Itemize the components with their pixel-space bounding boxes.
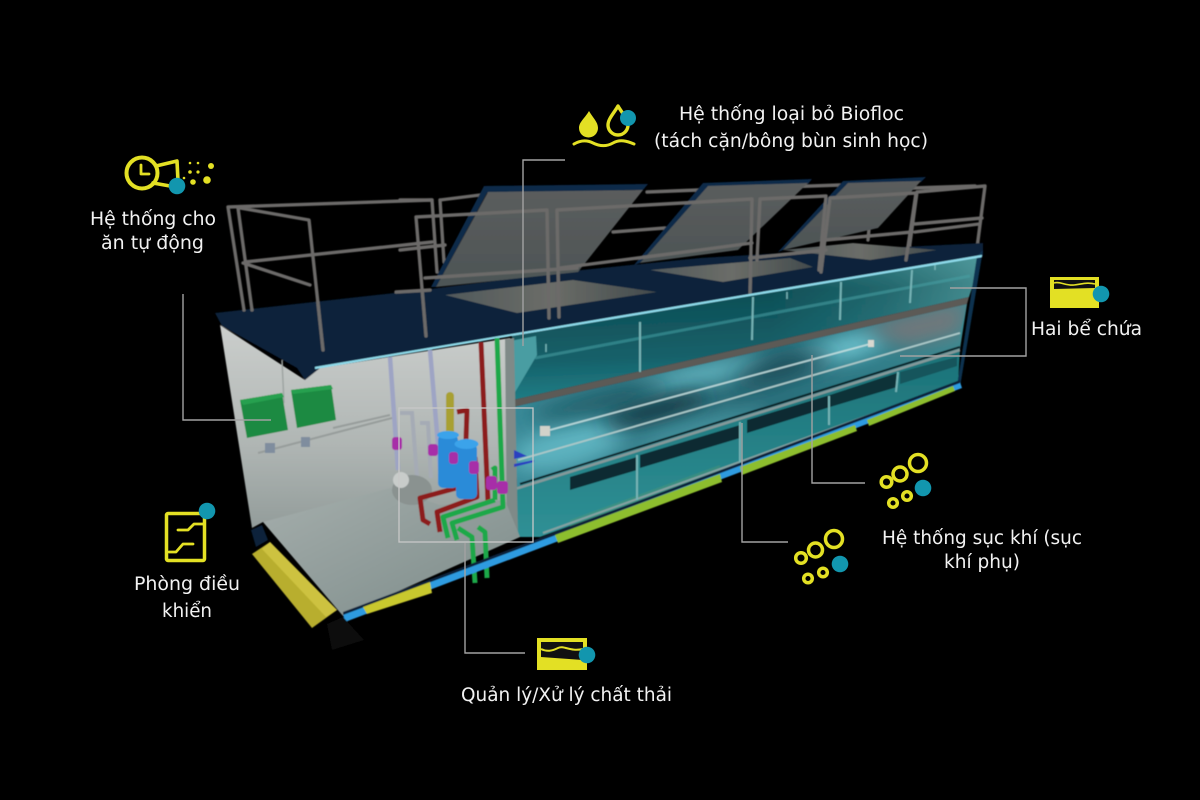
- small aerator head: [868, 340, 874, 347]
- hatch openings: [445, 243, 937, 313]
- floor corner block: [251, 525, 268, 547]
- mid shelf: [513, 297, 969, 407]
- icon: aeration 2: [796, 530, 848, 583]
- grey-lilac pipes: [390, 350, 441, 480]
- icon: waste management: [537, 638, 595, 670]
- connector: aeration 1: [812, 355, 865, 483]
- label: feeder: ăn tự động: [101, 233, 204, 254]
- icon: water drops: [574, 106, 636, 146]
- ramp base block: [327, 617, 364, 650]
- control box: left: [240, 393, 392, 453]
- label: control room: khiển: [162, 601, 212, 622]
- room floor: [263, 488, 520, 616]
- water light and shadow patches: [506, 300, 967, 482]
- label: aeration: Hệ thống sục khí (sục: [882, 528, 1082, 549]
- glass rails and posts: [515, 264, 960, 533]
- control box: right: [291, 385, 336, 447]
- tank corner post: [505, 338, 518, 537]
- label: control room: [134, 574, 240, 622]
- connector: feeder: [183, 294, 271, 420]
- yellow ramp: [252, 542, 337, 628]
- infographic canvas: [92, 104, 1140, 705]
- label: feeder: Hệ thống cho: [90, 209, 216, 230]
- label: biofloc: [654, 104, 928, 152]
- connector: aeration 2: [742, 423, 788, 542]
- lower tank dark windows: [570, 357, 957, 490]
- label: two tanks: Hai bể chứa: [1031, 319, 1142, 340]
- yellow pipe: [446, 396, 454, 436]
- wall divider: [282, 360, 284, 403]
- connector: two tanks: [900, 288, 1026, 356]
- lower tank bottom tint: [570, 465, 720, 528]
- control room wall: [220, 325, 510, 540]
- 3D container illustration: [215, 177, 985, 650]
- back railings: [400, 185, 985, 272]
- label: feeder: [90, 209, 216, 254]
- hatch lids: [431, 177, 926, 287]
- green pipes: [443, 338, 503, 583]
- highlight frame around pipes: [399, 408, 533, 542]
- aerator head: [540, 426, 550, 436]
- lower tank: [515, 349, 960, 537]
- base strip: [343, 380, 962, 622]
- front railings: [228, 193, 916, 350]
- cyan roof edge: [315, 256, 982, 368]
- icon: feeder: [126, 158, 214, 194]
- right end frame: [957, 250, 983, 387]
- connector: biofloc: [523, 160, 565, 346]
- upper tank highlight: [512, 256, 982, 400]
- purple valves: [392, 437, 508, 494]
- label: aeration: khí phụ): [944, 552, 1020, 573]
- label: control room: Phòng điều: [134, 574, 240, 595]
- icon: control room: [166, 503, 215, 560]
- label: biofloc: (tách cặn/bông bùn sinh học): [654, 131, 928, 152]
- pump: [392, 472, 432, 505]
- red pipes: [420, 342, 488, 532]
- blue tray: [514, 450, 534, 467]
- label: biofloc: Hệ thống loại bỏ Biofloc: [679, 104, 904, 125]
- label: waste management: Quản lý/Xử lý chất thải: [461, 685, 672, 706]
- tank upper glass: [512, 256, 982, 400]
- icon: aeration 1: [881, 454, 931, 507]
- roof: [215, 243, 983, 380]
- icon: two tanks: [1050, 277, 1109, 308]
- blue filter cylinders: [437, 431, 478, 499]
- settling cone: [510, 336, 537, 394]
- upper tank light band: [535, 276, 970, 358]
- label: aeration: [882, 528, 1082, 573]
- connector: waste: [465, 543, 525, 653]
- mid water: [513, 304, 967, 487]
